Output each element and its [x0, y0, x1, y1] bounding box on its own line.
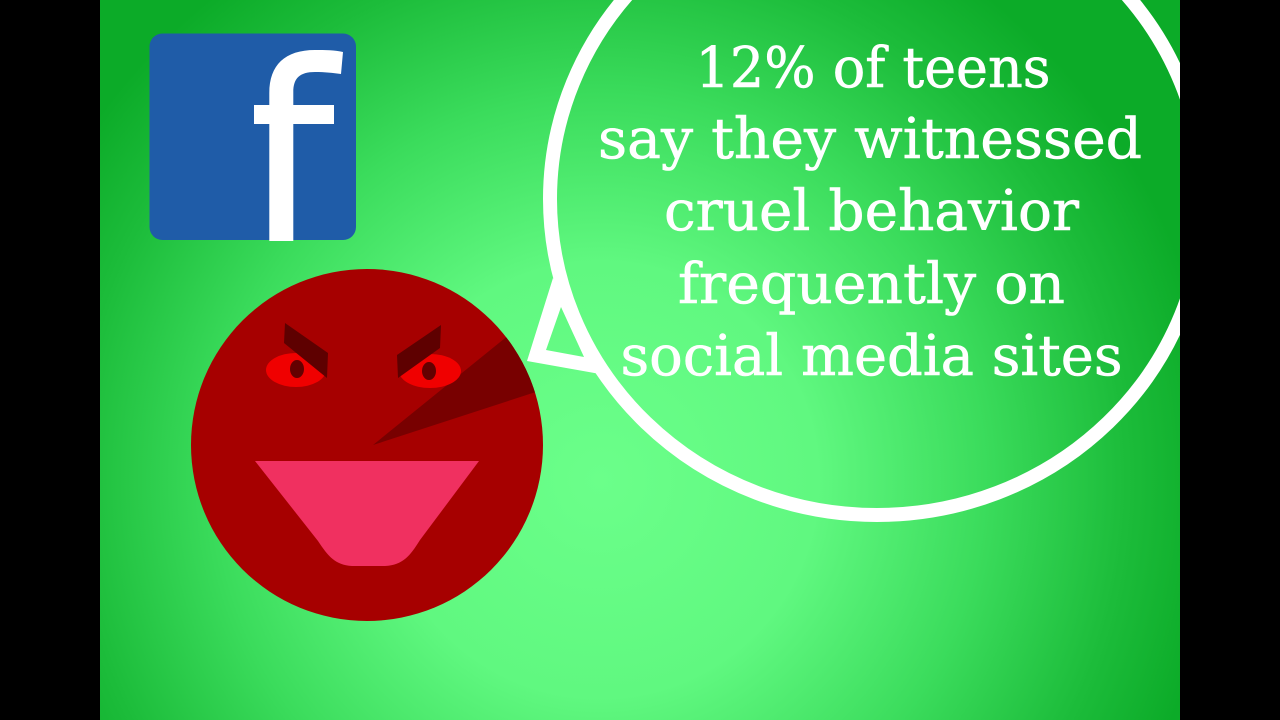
callout text: 12% of teens [696, 36, 1050, 101]
left eyebrow [284, 323, 328, 378]
face shadow streak [373, 337, 535, 445]
callout text: frequently on [678, 252, 1065, 317]
speech bubble [527, 0, 1204, 515]
left eye [266, 353, 326, 387]
bubble tail [527, 278, 600, 374]
right eye [399, 354, 461, 388]
mouth [255, 461, 479, 566]
icon: devil face [191, 269, 560, 621]
callout text [598, 36, 1142, 389]
callout text: cruel behavior [664, 179, 1079, 244]
icon: facebook logo [150, 34, 356, 241]
callout text: say they witnessed [598, 107, 1142, 172]
bubble circle [550, 0, 1204, 515]
callout text: social media sites [620, 324, 1122, 389]
right eyebrow [397, 325, 441, 378]
